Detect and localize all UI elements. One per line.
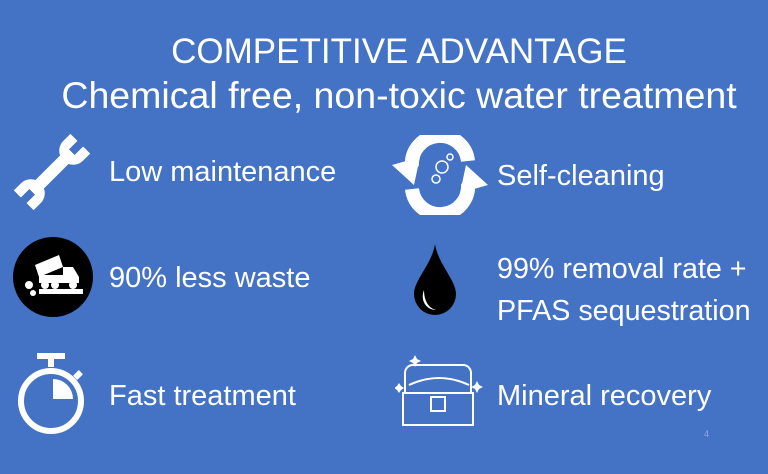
- title: [61, 32, 737, 116]
- title: Chemical free, non-toxic water treatment: [61, 74, 737, 116]
- icon: truck circle: [13, 237, 93, 317]
- text: removal rate: 99% removal rate +: [497, 253, 747, 285]
- text: low maintenance: Low maintenance: [109, 156, 336, 188]
- page number: 4: [704, 429, 709, 439]
- icon: treasure chest: [395, 355, 483, 426]
- text: mineral recovery: Mineral recovery: [497, 380, 711, 412]
- text: self-cleaning: Self-cleaning: [497, 160, 665, 192]
- title: COMPETITIVE ADVANTAGE: [171, 32, 627, 71]
- text: less waste: 90% less waste: [109, 262, 310, 294]
- icon: drop: [414, 244, 456, 315]
- icon: stopwatch: [18, 353, 84, 434]
- icon: self-cleaning arrows: [392, 135, 488, 215]
- icon: wrench: [14, 134, 90, 210]
- text: removal rate: [497, 253, 751, 327]
- text: fast treatment: Fast treatment: [109, 380, 296, 412]
- text: removal rate: PFAS sequestration: [497, 295, 751, 327]
